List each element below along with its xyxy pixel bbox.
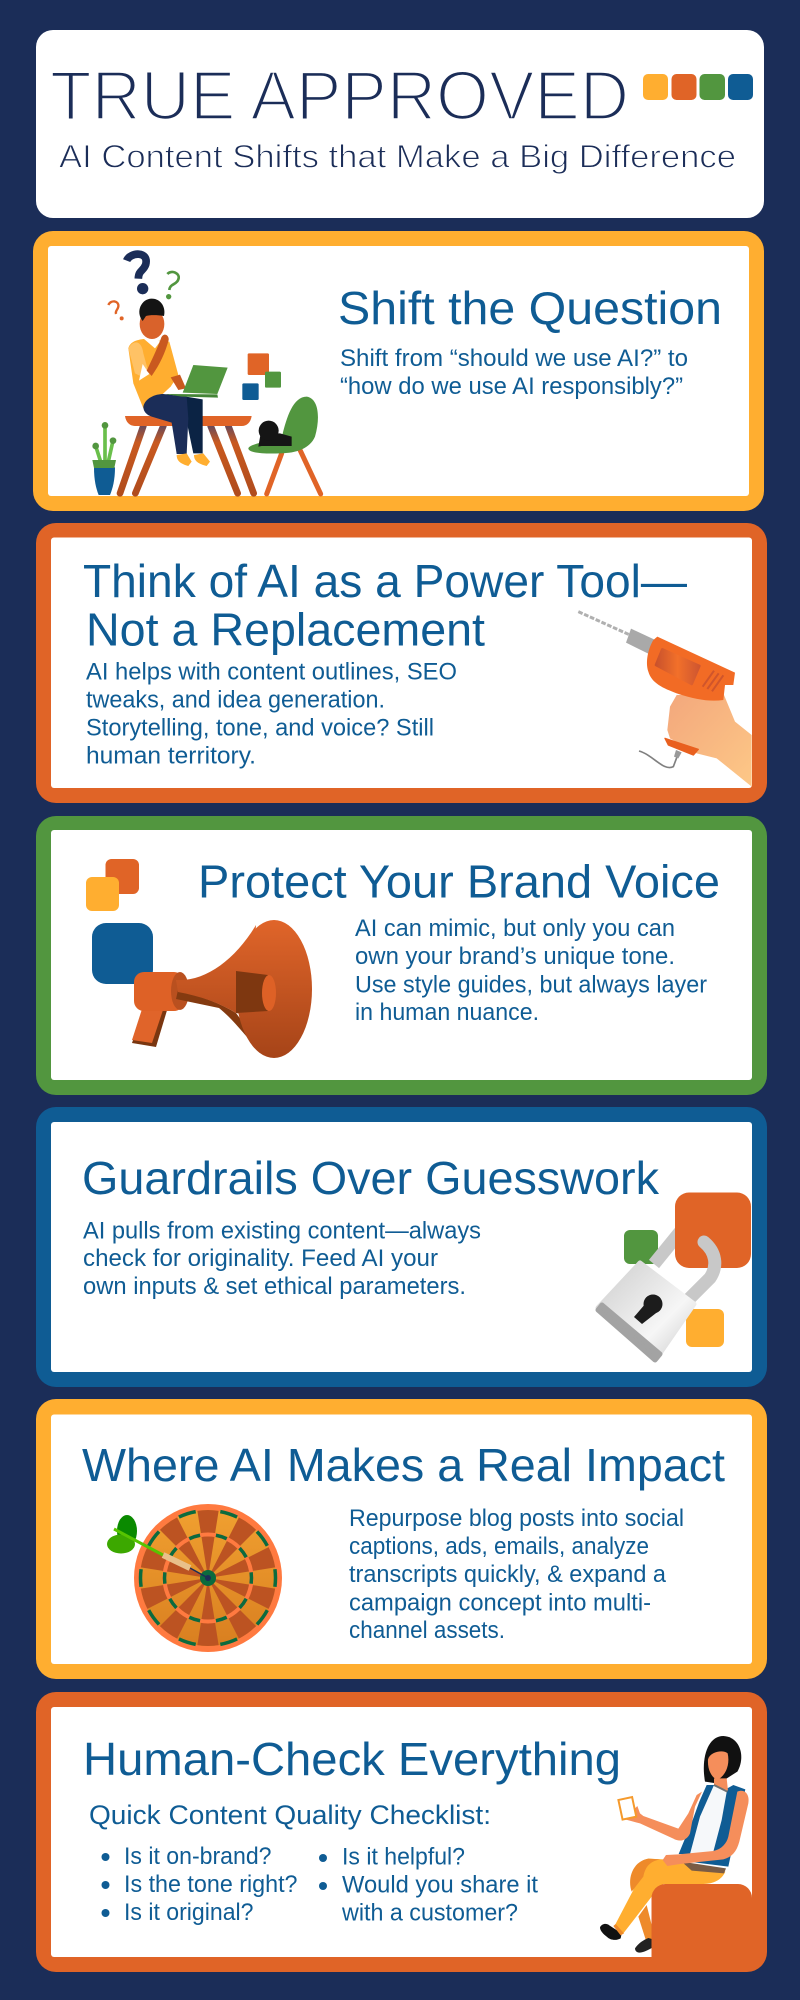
body text bbox=[340, 345, 688, 400]
icon: four colour squares bbox=[643, 74, 753, 100]
body text: Shift from “should we use AI?” to bbox=[340, 345, 688, 372]
body text: captions, ads, emails, analyze bbox=[349, 1533, 649, 1560]
panel: human check bbox=[36, 1692, 767, 1972]
body text bbox=[349, 1505, 684, 1644]
heading: Think of AI as a Power Tool— bbox=[83, 555, 687, 607]
heading: Human-Check Everything bbox=[83, 1733, 621, 1785]
panel: power tool bbox=[36, 523, 767, 803]
checklist column 2: with a customer? bbox=[341, 1900, 518, 1926]
body text bbox=[86, 658, 457, 770]
illustration: woman with phone seated on block bbox=[600, 1736, 749, 1953]
icon: decorative squares bbox=[86, 859, 153, 984]
body text: in human nuance. bbox=[355, 999, 539, 1026]
checklist column 1: Is the tone right? bbox=[124, 1871, 298, 1898]
checklist column 2: Is it helpful? bbox=[342, 1844, 465, 1870]
body text: tweaks, and idea generation. bbox=[86, 686, 385, 714]
body text: AI can mimic, but only you can bbox=[355, 915, 675, 942]
heading: Shift the Question bbox=[338, 282, 722, 334]
body text: own your brand’s unique tone. bbox=[355, 943, 675, 970]
checklist column 2: Would you share it bbox=[342, 1872, 538, 1898]
body text: Use style guides, but always layer bbox=[355, 972, 707, 998]
heading: Guardrails Over Guesswork bbox=[82, 1152, 660, 1204]
checklist column 2 bbox=[319, 1844, 538, 1926]
panel: shift the question bbox=[33, 231, 764, 511]
checklist title: Quick Content Quality Checklist: bbox=[89, 1800, 491, 1830]
icon: drill in hand bbox=[578, 612, 752, 787]
subtitle: AI Content Shifts that Make a Big Difference bbox=[59, 138, 736, 174]
illustration: man with laptop on table bbox=[92, 254, 321, 495]
body text: human territory. bbox=[86, 742, 256, 770]
body text: channel assets. bbox=[349, 1617, 505, 1644]
body text: Repurpose blog posts into social bbox=[349, 1505, 684, 1532]
checklist column 1: Is it on-brand? bbox=[124, 1843, 272, 1870]
panel: brand voice bbox=[36, 816, 767, 1095]
body text: own inputs & set ethical parameters. bbox=[83, 1273, 466, 1300]
checklist column 1 bbox=[102, 1843, 298, 1926]
body text: check for originality. Feed AI your bbox=[83, 1245, 438, 1272]
body text: Storytelling, tone, and voice? Still bbox=[86, 714, 434, 742]
panel: header bbox=[36, 30, 764, 218]
panel: real impact bbox=[36, 1399, 767, 1679]
icon: megaphone bbox=[132, 920, 312, 1058]
body text: AI helps with content outlines, SEO bbox=[86, 658, 457, 686]
body text: transcripts quickly, & expand a bbox=[349, 1561, 667, 1588]
checklist column 1: Is it original? bbox=[124, 1899, 254, 1926]
body text bbox=[83, 1218, 481, 1300]
icon: dartboard with dart bbox=[107, 1504, 282, 1652]
body text: campaign concept into multi- bbox=[349, 1590, 651, 1616]
icon: padlock with squares bbox=[598, 1192, 751, 1360]
heading: Where AI Makes a Real Impact bbox=[82, 1439, 725, 1491]
heading bbox=[83, 555, 687, 656]
title: TRUE APPROVED bbox=[50, 56, 629, 134]
heading: Protect Your Brand Voice bbox=[198, 856, 720, 908]
body text: “how do we use AI responsibly?” bbox=[340, 373, 683, 400]
panel: guardrails bbox=[36, 1107, 767, 1387]
shape: orange block under seated woman bbox=[652, 1884, 752, 1960]
body text bbox=[355, 915, 707, 1026]
heading: Not a Replacement bbox=[86, 604, 485, 656]
body text: AI pulls from existing content—always bbox=[83, 1218, 481, 1244]
